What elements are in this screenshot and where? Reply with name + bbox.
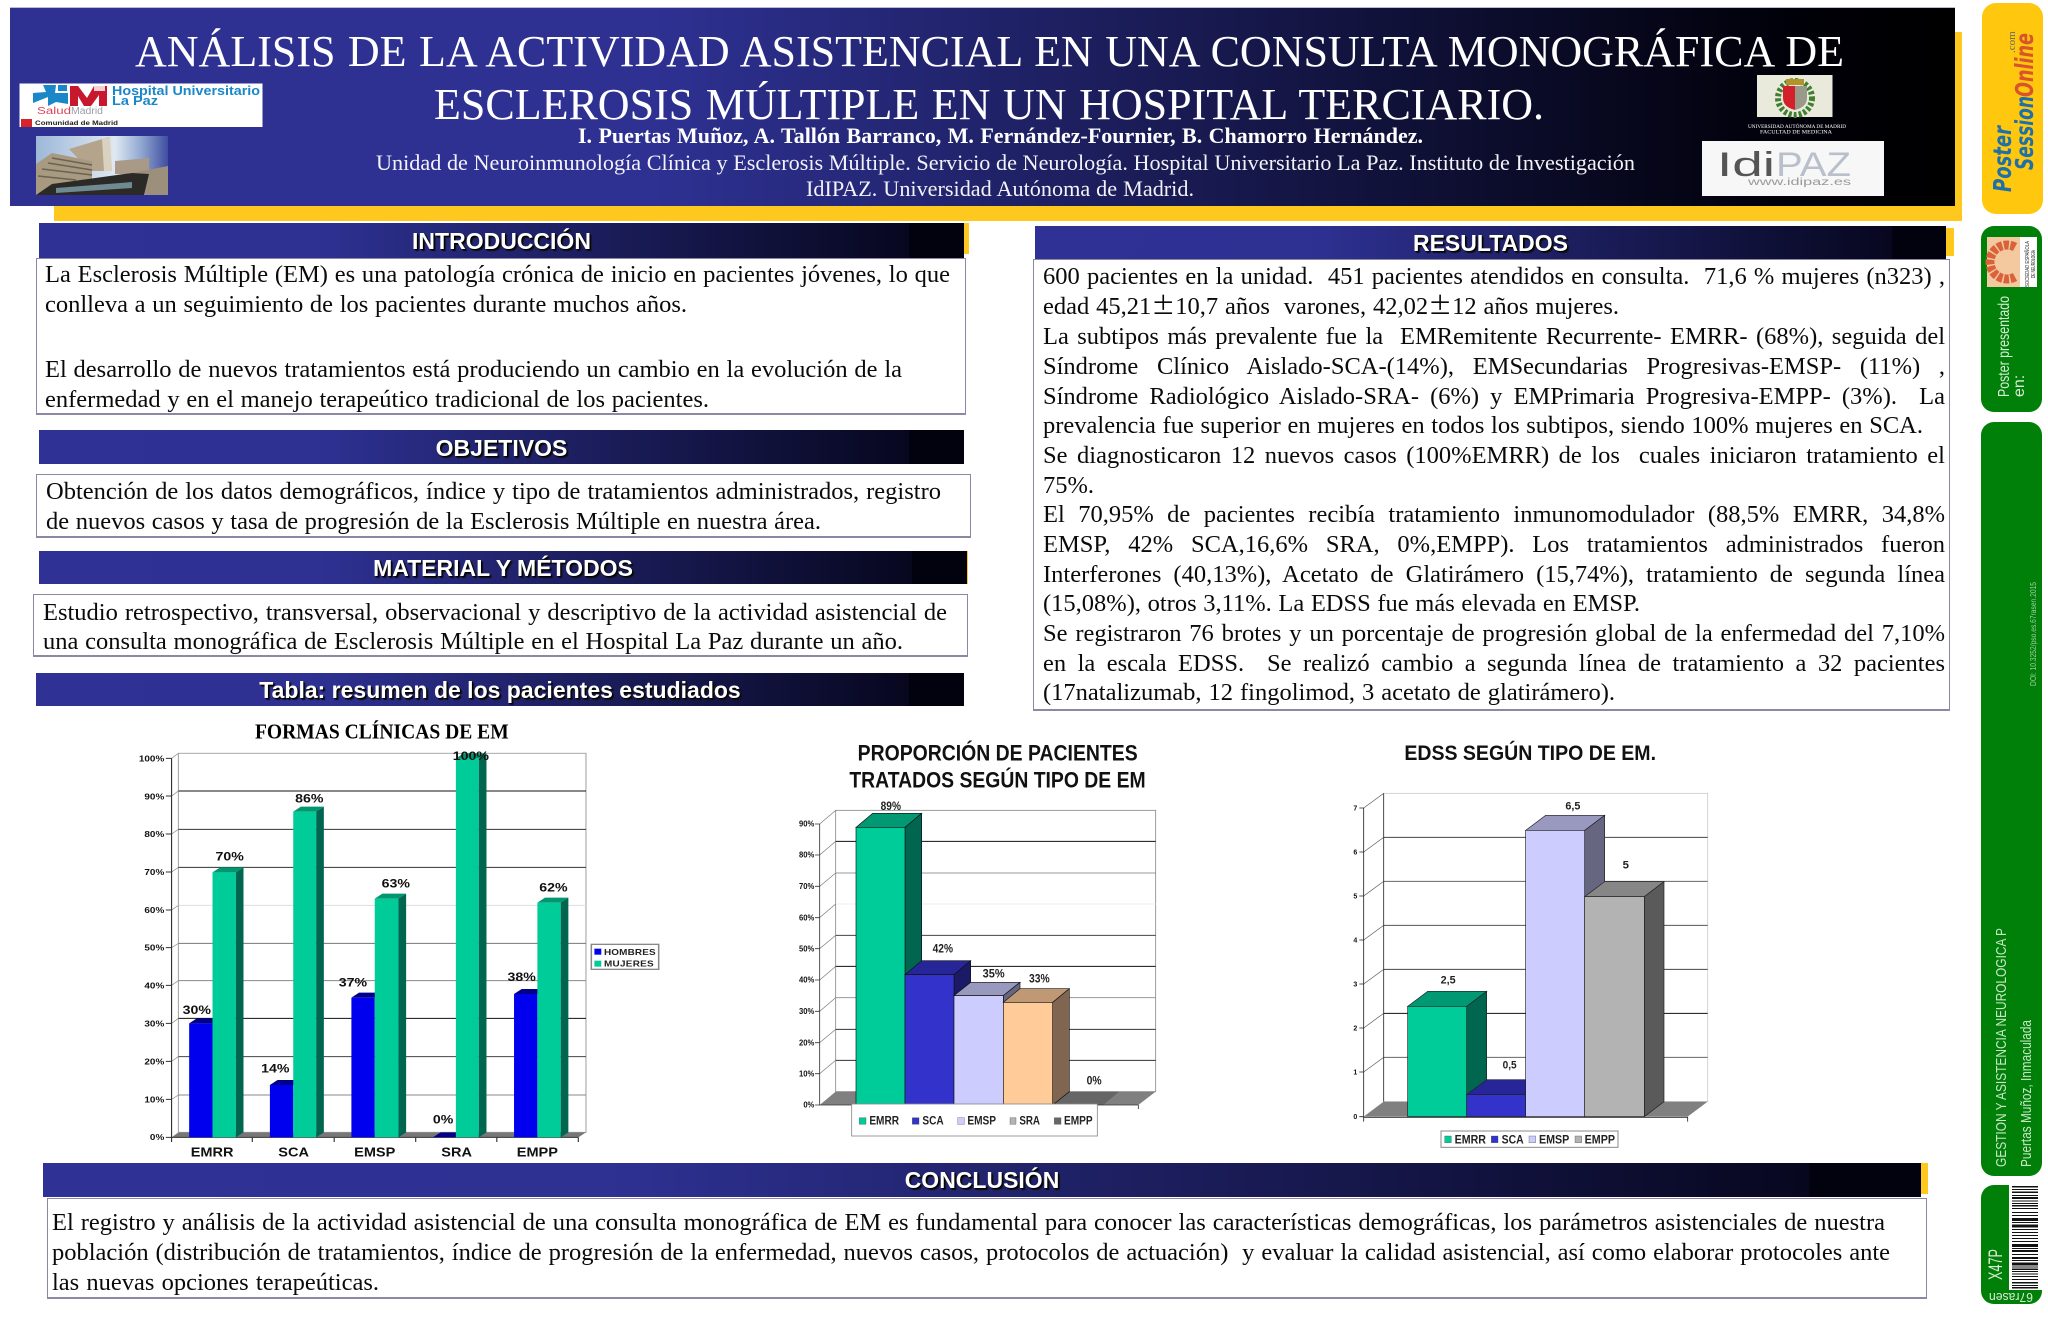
logo: Hospital Universitario La Paz: Hospital Universitario <box>112 84 260 98</box>
logo: Sociedad Española de Neurología <box>1987 237 2037 287</box>
text: conclusión: las nuevas opciones terapeúticas. <box>52 1269 379 1296</box>
heading: introducción: INTRODUCCIÓN <box>412 228 591 254</box>
data labels: 100% <box>453 749 489 763</box>
text: conclusión: población (distribución de tratamientos, índice de progresión de la enfermedad, nuevos casos, protocolos de actuación) y evaluar la calidad asistencial, así como elaborar protocoles ante <box>52 1239 1890 1266</box>
data labels: 14% <box>261 1062 290 1075</box>
category labels: EMPP <box>517 1146 558 1159</box>
data labels: 70% <box>216 850 244 863</box>
y axis labels: 90% <box>799 819 815 829</box>
logo: Sociedad Española de Neurología: SOCIEDAD ESPAÑOLA <box>2024 241 2031 287</box>
text: resultados: El 70,95% de pacientes recibía tratamiento inmunomodulador (88,5% EMRR, 34,8% <box>1043 501 1945 528</box>
sidebar: PosterSessionOnline badge: Poster <box>1988 125 2017 192</box>
text: resultados: en la escala EDSS. Se realizó cambio a segunda línea de tratamiento a 32 pacientes <box>1043 650 1945 677</box>
logo: IdiPAZ: www.idipaz.es <box>1746 177 1851 188</box>
header shadow band <box>54 32 1962 221</box>
sidebar: session details <box>1981 422 2042 1176</box>
y axis labels: 4 <box>1353 937 1357 944</box>
text: introducción <box>36 258 966 415</box>
legend: EMRR <box>869 1115 899 1128</box>
y axis labels: 40% <box>799 975 815 985</box>
y axis labels: 1 <box>1353 1069 1357 1076</box>
text: objetivos: Obtención de los datos demográficos, índice y tipo de tratamientos administrados, registro <box>46 478 941 505</box>
heading: resultados <box>1035 226 1946 259</box>
legend: SRA <box>1019 1115 1040 1128</box>
legend: MUJERES <box>604 959 654 969</box>
plot frame and gridlines <box>172 753 586 1132</box>
y axis labels: 40% <box>144 981 165 991</box>
data labels: 35% <box>983 967 1005 980</box>
sidebar: session details: Puertas Muñoz, Inmaculada <box>2018 1019 2035 1167</box>
legend: SCA <box>922 1115 944 1128</box>
y axis labels: 0% <box>803 1100 815 1110</box>
legend: SCA <box>1502 1133 1524 1146</box>
barcode <box>2012 1186 2038 1288</box>
y axis labels: 0% <box>150 1133 165 1142</box>
sidebar: barcode tag <box>1981 1185 2042 1305</box>
panel: introducción <box>36 223 969 415</box>
legend <box>852 1104 1097 1136</box>
y axis labels: 3 <box>1353 981 1357 988</box>
heading: tabla <box>36 673 964 706</box>
sidebar: poster presentado en: Poster presentado <box>1996 296 2013 397</box>
chart title: TRATADOS SEGÚN TIPO DE EM <box>849 768 1146 793</box>
y axis labels <box>139 754 165 1142</box>
legend: EMRR <box>1455 1133 1487 1146</box>
data labels: 0,5 <box>1503 1060 1517 1072</box>
text: resultados <box>1033 259 1950 711</box>
legend: EMPP <box>1064 1115 1093 1128</box>
y axis labels: 7 <box>1353 805 1357 812</box>
logo: Universidad Autónoma de Madrid crest: UNIVERSIDAD AUTÓNOMA DE MADRID <box>1748 122 1846 130</box>
logo: Hospital Universitario La Paz: La Paz <box>112 94 158 108</box>
authors: I. Puertas Muñoz, A. Tallón Barranco, M. Fernández-Fournier, B. Chamorro Hernández. <box>578 123 1423 148</box>
bars <box>856 813 1069 1105</box>
y axis labels: 70% <box>144 868 165 877</box>
data labels: 6,5 <box>1565 800 1580 812</box>
sidebar: session details: DOI: 10.3252/pso.es.67rasen.2015 <box>2029 582 2038 686</box>
data labels: 63% <box>382 877 410 890</box>
text: resultados: 600 pacientes en la unidad. 451 pacientes atendidos en consulta. 71,6 % mujeres (n323) , <box>1043 263 1945 290</box>
text: resultados: (15,08%), otros 3,11%. La EDSS fue más elevada en EMSP. <box>1043 590 1640 617</box>
chart title <box>849 741 1146 793</box>
sidebar: PosterSessionOnline badge: .com <box>2006 31 2018 53</box>
text: material y métodos: una consulta monográfica de Esclerosis Múltiple en el Hospital La Paz durante un año. <box>43 628 903 655</box>
legend: HOMBRES <box>604 948 656 957</box>
icon: red M <box>70 86 107 106</box>
icon: laurel wreath <box>1778 81 1812 115</box>
y axis labels: 60% <box>144 906 165 915</box>
text: resultados: EMSP, 42% SCA,16,6% SRA, 0%,EMPP). Los tratamientos administrados fueron <box>1043 531 1945 558</box>
data labels: 89% <box>881 800 902 813</box>
logo: Sociedad Española de Neurología: DE NEUROLOGÍA <box>2030 250 2037 278</box>
photo: hospital building <box>36 136 168 195</box>
affiliation: IdIPAZ. Universidad Autónoma de Madrid. <box>806 176 1194 201</box>
heading: material y métodos: MATERIAL Y MÉTODOS <box>373 555 633 581</box>
text: material y métodos: Estudio retrospectivo, transversal, observacional y descriptivo de la actividad asistencial de <box>43 599 947 626</box>
logo: Hospital Universitario La Paz: Comunidad de Madrid <box>35 121 118 127</box>
text: resultados: Interferones (40,13%), Acetato de Glatirámero (15,74%), tratamiento de segunda línea <box>1043 561 1945 588</box>
panel: conclusión <box>43 1163 1928 1299</box>
y axis labels: 10% <box>799 1068 815 1078</box>
sidebar: barcode tag: 67rasen <box>1989 1290 2033 1305</box>
heading: objetivos <box>39 430 964 464</box>
data labels: 5 <box>1623 860 1629 872</box>
chart title: PROPORCIÓN DE PACIENTES <box>858 741 1138 766</box>
data labels: 42% <box>933 943 954 956</box>
y axis labels: 30% <box>144 1019 165 1028</box>
y axis labels: 30% <box>799 1006 815 1016</box>
text: resultados: Se diagnosticaron 12 nuevos casos (100%EMRR) de los cuales iniciaron tratamiento el <box>1043 442 1945 469</box>
data labels: 0% <box>1087 1074 1102 1087</box>
legend: EMPP <box>1585 1133 1615 1146</box>
y axis labels: 100% <box>139 754 165 764</box>
plot frame and gridlines <box>820 810 1156 1092</box>
chart title: EDSS SEGÚN TIPO DE EM. <box>1404 740 1656 765</box>
floor <box>1364 1102 1708 1117</box>
text: resultados: Se registraron 76 brotes y un porcentaje de progresión global de la enfermedad del 7,10% <box>1043 620 1945 647</box>
category labels: EMSP <box>354 1146 395 1159</box>
y axis labels: 5 <box>1353 893 1357 900</box>
logo: Hospital Universitario La Paz: Salud <box>37 106 71 117</box>
y axis labels: 50% <box>144 943 165 953</box>
sidebar: poster presentado en <box>1981 226 2042 412</box>
axes <box>1359 808 1688 1122</box>
bars <box>1408 815 1664 1117</box>
text: objetivos: de nuevos casos y tasa de progresión de la Esclerosis Múltiple en nuestra área. <box>46 508 821 535</box>
y axis labels <box>1353 805 1357 1121</box>
logo: IdiPAZ <box>1702 141 1884 196</box>
data labels: 86% <box>295 792 324 805</box>
y axis labels: 70% <box>799 881 815 891</box>
sidebar: PosterSessionOnline badge: Online <box>2010 33 2039 97</box>
bars: mujeres <box>212 753 568 1137</box>
data labels: 30% <box>183 1003 211 1017</box>
panel: resultados <box>1033 226 1954 711</box>
logo: Hospital Universitario La Paz: Madrid <box>71 106 103 117</box>
legend <box>591 944 659 969</box>
floor <box>820 1092 1156 1105</box>
text: resultados: prevalencia fue superior en mujeres en todos los subtipos, siendo 100% mujeres en SCA. <box>1043 412 1923 439</box>
heading: conclusión: CONCLUSIÓN <box>905 1167 1059 1193</box>
text: resultados: Síndrome Clínico Aislado-SCA-(14%), EMSecundarias Progresivas-EMSP- (11%) , <box>1043 353 1945 380</box>
y axis labels: 0 <box>1353 1114 1357 1121</box>
data labels <box>881 800 1102 1087</box>
data labels <box>183 749 568 1126</box>
icon: blue cross <box>33 85 68 106</box>
legend: EMSP <box>1539 1133 1570 1146</box>
logo: Universidad Autónoma de Madrid crest <box>1748 75 1846 136</box>
text: conclusión: El registro y análisis de la actividad asistencial de una consulta monográfica de EM es fundamental para conocer las características demográficas, los parámetros asistenciales de nuestra <box>52 1209 1885 1236</box>
heading: resultados: RESULTADOS <box>1413 230 1568 256</box>
text: material y métodos <box>33 594 968 657</box>
title: ESCLEROSIS MÚLTIPLE EN UN HOSPITAL TERCIARIO. <box>434 80 1544 129</box>
data labels: 33% <box>1029 973 1050 986</box>
y axis labels: 80% <box>799 850 815 860</box>
icon: shield <box>1783 86 1795 110</box>
text: introducción: El desarrollo de nuevos tratamientos está produciendo un cambio en la evolución de la <box>45 356 902 383</box>
chart: formas clínicas de EM <box>139 720 660 1159</box>
logo: Hospital Universitario La Paz <box>20 84 262 127</box>
category labels <box>191 1146 558 1159</box>
heading: objetivos: OBJETIVOS <box>436 435 567 461</box>
text: resultados: La subtipos más prevalente fue la EMRemitente Recurrente- EMRR- (68%), seguida del <box>1043 323 1945 350</box>
logo: IdiPAZ: PAZ <box>1776 146 1851 184</box>
y axis labels: 50% <box>799 943 815 953</box>
heading: introducción <box>39 223 964 258</box>
heading: material y métodos <box>39 551 968 584</box>
logo: IdiPAZ: Idi <box>1717 146 1775 184</box>
y axis labels: 6 <box>1353 849 1357 856</box>
heading: conclusión <box>43 1163 1921 1197</box>
data labels: 38% <box>508 970 536 984</box>
text: introducción: conlleva a un seguimiento de los pacientes durante muchos años. <box>45 291 687 318</box>
axes <box>166 758 578 1142</box>
y axis labels <box>799 819 815 1110</box>
sidebar: PosterSessionOnline badge: Session <box>2010 96 2039 170</box>
axes <box>815 824 1138 1109</box>
data labels: 2,5 <box>1441 974 1456 986</box>
title <box>135 27 1844 129</box>
chart title: FORMAS CLÍNICAS DE EM <box>255 720 509 743</box>
sidebar: session details: GESTION Y ASISTENCIA NEUROLOGICA P <box>1993 928 2010 1167</box>
y axis labels: 2 <box>1353 1025 1357 1032</box>
text: resultados: Síndrome Radiológico Aislado-SRA- (6%) y EMPrimaria Progresiva-EMPP- (3%). La <box>1043 383 1945 410</box>
bars: hombres <box>189 989 545 1137</box>
sidebar: poster presentado en: en: <box>2011 375 2028 397</box>
y axis labels: 10% <box>144 1095 165 1104</box>
chart: proporción de pacientes tratados <box>799 740 1156 1136</box>
data labels: 0% <box>433 1112 454 1126</box>
legend <box>1441 1131 1618 1147</box>
text: resultados: (17natalizumab, 12 fingolimod, 3 acetato de glatirámero). <box>1043 679 1615 706</box>
legend: EMSP <box>967 1115 996 1128</box>
affiliation: Unidad de Neuroinmunología Clínica y Esclerosis Múltiple. Servicio de Neurología. Hospital Universitario La Paz. Instituto de Investigación <box>376 150 1635 175</box>
header banner <box>10 7 1955 206</box>
logo: Universidad Autónoma de Madrid crest: FACULTAD DE MEDICINA <box>1760 130 1832 136</box>
text: resultados: 75%. <box>1043 472 1094 499</box>
y axis labels: 80% <box>144 830 165 839</box>
affiliation <box>376 150 1635 201</box>
data labels: 37% <box>339 976 367 989</box>
text: objetivos <box>36 474 971 538</box>
data labels: 62% <box>539 881 568 894</box>
category labels: SRA <box>441 1146 472 1159</box>
y axis labels: 20% <box>799 1037 815 1047</box>
title: ANÁLISIS DE LA ACTIVIDAD ASISTENCIAL EN UNA CONSULTA MONOGRÁFICA DE <box>135 27 1844 76</box>
y axis labels: 60% <box>799 912 815 922</box>
floor <box>172 1132 586 1137</box>
chart: EDSS según tipo de EM <box>1353 740 1708 1148</box>
heading: tabla: Tabla: resumen de los pacientes estudiados <box>259 677 741 703</box>
text: resultados: edad 45,21±10,7 años varones, 42,02±12 años mujeres. <box>1043 286 1619 321</box>
text: introducción: enfermedad y en el manejo terapeútico tradicional de los pacientes. <box>45 386 709 413</box>
sidebar: PosterSessionOnline badge <box>1982 3 2043 214</box>
text: conclusión <box>47 1198 1927 1299</box>
category labels: SCA <box>278 1146 309 1159</box>
sidebar: barcode tag: X47P <box>1986 1249 2007 1280</box>
data labels <box>1441 800 1629 1072</box>
text: introducción: La Esclerosis Múltiple (EM) es una patología crónica de inicio en pacientes jóvenes, lo que <box>45 261 950 288</box>
y axis labels: 20% <box>144 1057 165 1066</box>
plot frame and gridlines <box>1364 793 1708 1102</box>
y axis labels: 90% <box>144 792 165 801</box>
category labels: EMRR <box>191 1146 234 1159</box>
